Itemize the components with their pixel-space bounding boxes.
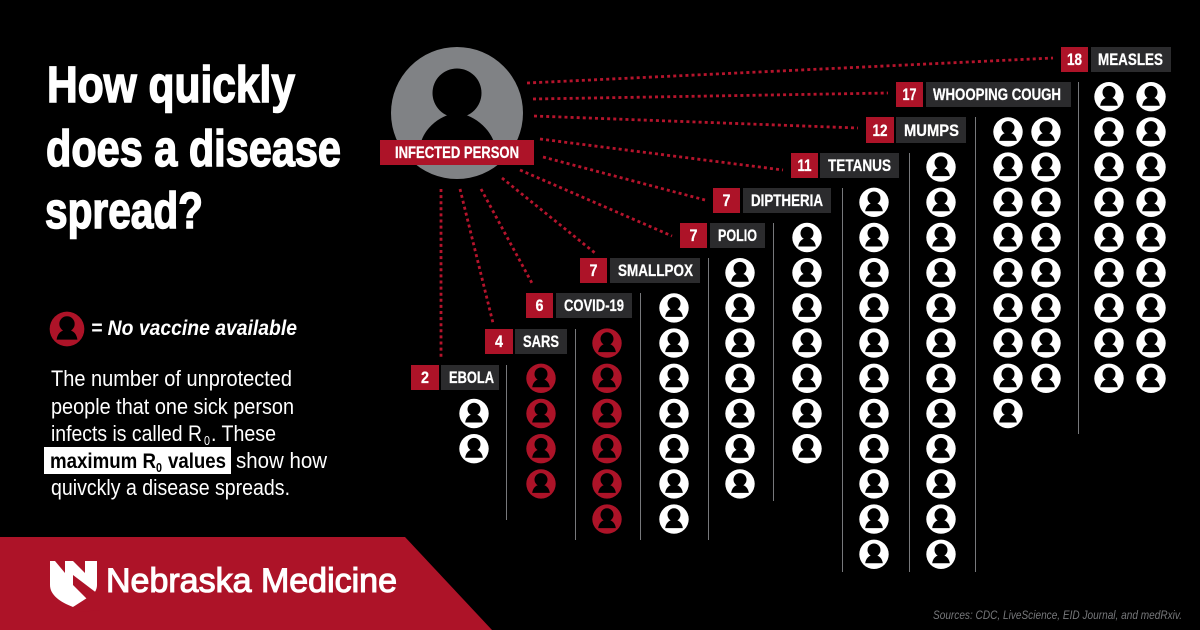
infected person icon and label: [380, 47, 534, 179]
explanatory text block: . These: [211, 421, 276, 446]
explanatory text block: quivckly a disease spreads.: [51, 475, 290, 500]
column: ebola 2: 2: [421, 368, 429, 387]
column: smallpox 7: [580, 258, 700, 534]
column: tetanus 11: TETANUS: [828, 157, 891, 175]
column: sars 4: [485, 329, 567, 499]
column: measles 18: 18: [1067, 50, 1082, 69]
column: ebola 2: [411, 365, 499, 463]
column: polio 7: [680, 223, 765, 499]
footer banner with logo: Nebraska Medicine: [106, 562, 397, 600]
explanatory text block: values: [168, 450, 226, 473]
column: polio 7: POLIO: [718, 227, 757, 245]
column: smallpox 7: 7: [590, 261, 598, 280]
icon: Nebraska Medicine shield: [50, 561, 100, 612]
column: measles 18: [1061, 47, 1171, 393]
explanatory text block: show how: [236, 448, 327, 473]
column: whooping cough 17: [896, 82, 1071, 428]
column: mumps 12: MUMPS: [904, 122, 959, 140]
explanatory text block: infects is called R: [51, 421, 202, 446]
infected person icon and label: INFECTED PERSON: [395, 144, 519, 162]
explanatory text block: 0: [204, 433, 210, 448]
column: mumps 12: 12: [872, 121, 888, 140]
dotted spread lines: [441, 58, 1053, 358]
column: tetanus 11: 11: [798, 156, 812, 175]
legend: no vaccine available: [50, 312, 297, 346]
footer banner with logo: [0, 537, 492, 630]
column: whooping cough 17: WHOOPING COUGH: [933, 86, 1061, 104]
column: tetanus 11: [791, 153, 899, 569]
column: covid-19 6: 6: [536, 296, 544, 315]
dividers: [506, 82, 1078, 572]
column: diptheria 7: 7: [722, 191, 730, 210]
column: smallpox 7: SMALLPOX: [618, 262, 693, 280]
column: polio 7: 7: [690, 226, 698, 245]
column: covid-19 6: COVID-19: [564, 297, 624, 315]
explanatory text block: [44, 366, 327, 500]
title: spread?: [45, 182, 203, 239]
column: sars 4: 4: [495, 332, 503, 351]
title: does a disease: [46, 120, 341, 177]
column: ebola 2: EBOLA: [449, 369, 494, 387]
column: covid-19 6: [526, 293, 632, 534]
title: [45, 56, 341, 239]
column: diptheria 7: [713, 188, 831, 463]
explanatory text block: The number of unprotected: [51, 366, 292, 391]
explanatory text block: maximum R: [50, 450, 156, 473]
legend: no vaccine available: = No vaccine available: [91, 316, 297, 340]
column: whooping cough 17: 17: [902, 85, 916, 104]
explanatory text block: 0: [156, 460, 162, 475]
explanatory text block: people that one sick person: [51, 394, 294, 419]
column: mumps 12: [866, 117, 966, 569]
column: measles 18: MEASLES: [1098, 51, 1163, 69]
column: diptheria 7: DIPTHERIA: [751, 192, 823, 210]
title: How quickly: [47, 56, 296, 113]
column: sars 4: SARS: [523, 333, 559, 351]
